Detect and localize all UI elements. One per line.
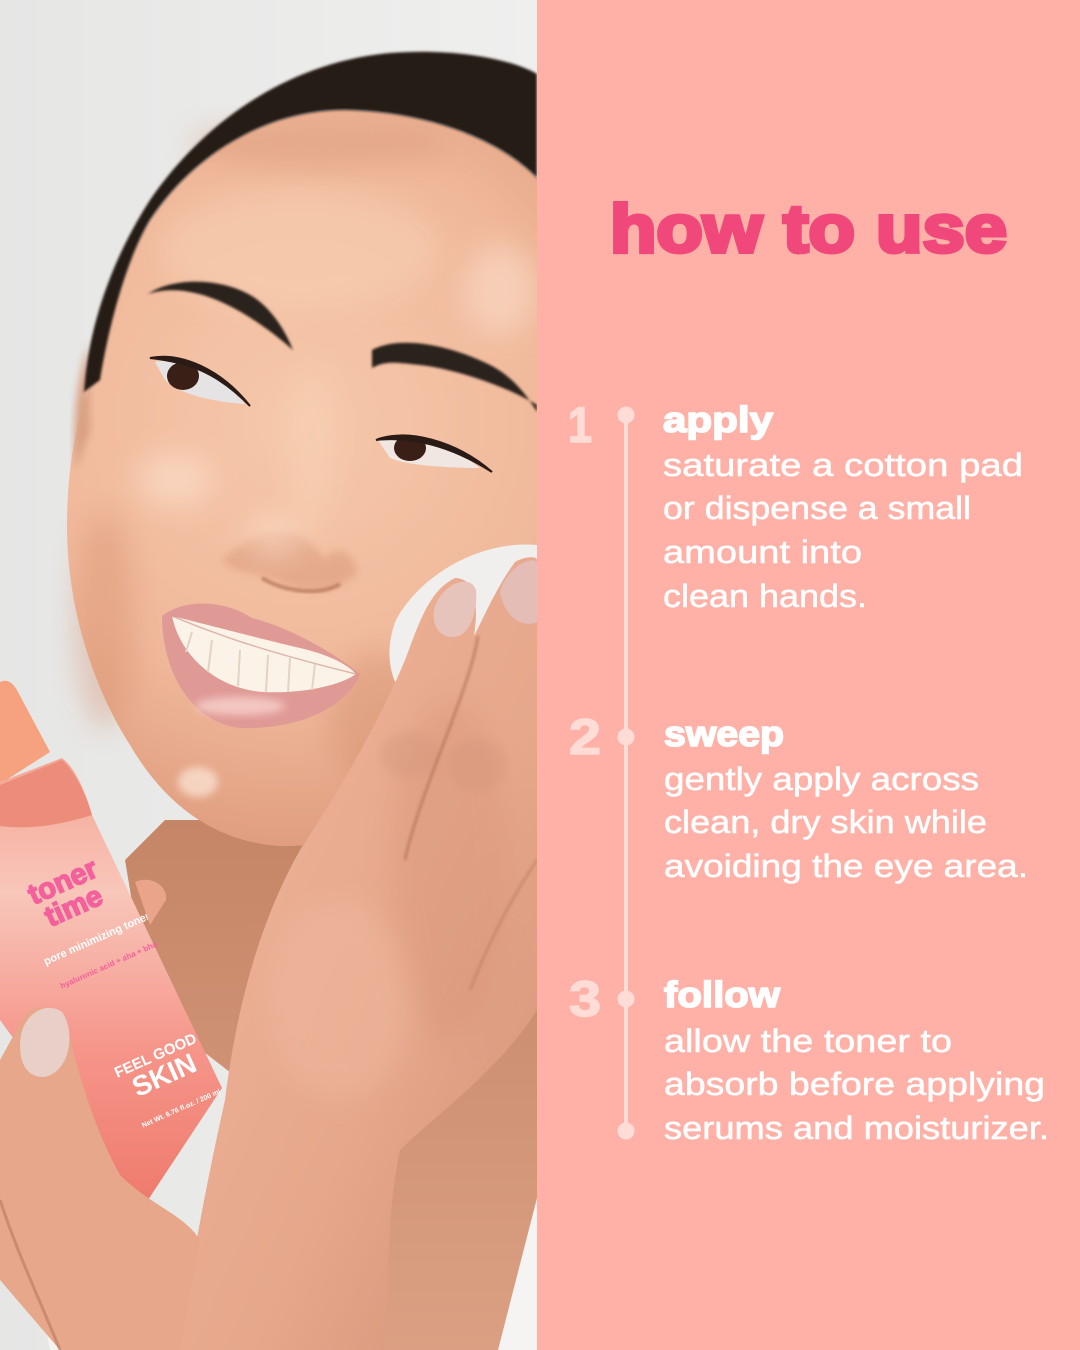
step 3 — [569, 971, 1049, 1146]
bottle label text: FEEL GOOD — [112, 1030, 199, 1082]
panel background — [537, 0, 1080, 1350]
left hand holding bottle — [0, 880, 200, 1350]
neck and chest — [125, 820, 537, 1350]
step 1 description: clean hands. — [663, 578, 867, 614]
white top at lower right — [40, 1198, 537, 1350]
photo background — [0, 0, 537, 1350]
heading: how to use — [610, 191, 1007, 267]
eyebrows — [148, 282, 537, 412]
bottle label text: SKIN — [127, 1047, 201, 1103]
bottle label text: pore minimizing toner — [42, 910, 153, 968]
step 1 description: saturate a cotton pad — [663, 447, 1023, 483]
step 2 description: avoiding the eye area. — [664, 848, 1028, 884]
bottle label text: Net Wt. 6.76 fl.oz. / 200 ml — [141, 1088, 222, 1130]
bottle cap — [0, 681, 50, 784]
bottle label text: toner — [23, 853, 103, 911]
photo: woman applying toner with a cotton pad — [0, 0, 537, 1350]
hair — [84, 52, 537, 392]
ear shadow — [74, 345, 90, 470]
face — [67, 110, 537, 846]
step 2 — [569, 709, 1028, 884]
fingernails — [434, 582, 476, 637]
step 3 description: serums and moisturizer. — [664, 1110, 1049, 1146]
mouth — [162, 603, 360, 728]
panel: how to use — [537, 0, 1080, 1350]
step number 1: 1 — [568, 397, 592, 453]
nose — [222, 513, 358, 591]
step 3 description — [664, 1023, 1049, 1146]
cotton pad — [389, 545, 537, 688]
bottle label text: hyaluronic acid + aha + bha — [59, 939, 159, 991]
step 1 title: apply — [663, 399, 773, 440]
bottle body — [0, 758, 222, 1206]
step 3 title: follow — [664, 974, 781, 1015]
step 2 description — [664, 761, 1028, 884]
step 2 description: clean, dry skin while — [664, 804, 987, 840]
step number 3: 3 — [569, 971, 601, 1027]
step 2 description: gently apply across — [664, 761, 979, 797]
bottle neck foam — [0, 760, 92, 827]
bottle of toner — [0, 681, 229, 1206]
step 3 description: absorb before applying — [664, 1066, 1045, 1102]
step 1 description — [663, 447, 1023, 614]
bottle label text: time — [40, 880, 108, 933]
knuckles — [388, 753, 389, 754]
bottle label text — [26, 860, 220, 1128]
step 2 title: sweep — [664, 713, 784, 754]
step number 2: 2 — [569, 709, 601, 765]
timeline — [618, 406, 634, 1140]
step 3 description: allow the toner to — [664, 1023, 952, 1059]
step 1 description: or dispense a small — [663, 490, 971, 526]
face highlights and shading — [75, 123, 536, 797]
hand holding cotton pad — [180, 545, 537, 1350]
eyes — [150, 357, 492, 472]
step 1 — [568, 397, 1023, 614]
step 1 description: amount into — [663, 534, 862, 570]
finger divider — [405, 636, 478, 860]
hand and forearm — [180, 557, 537, 1350]
